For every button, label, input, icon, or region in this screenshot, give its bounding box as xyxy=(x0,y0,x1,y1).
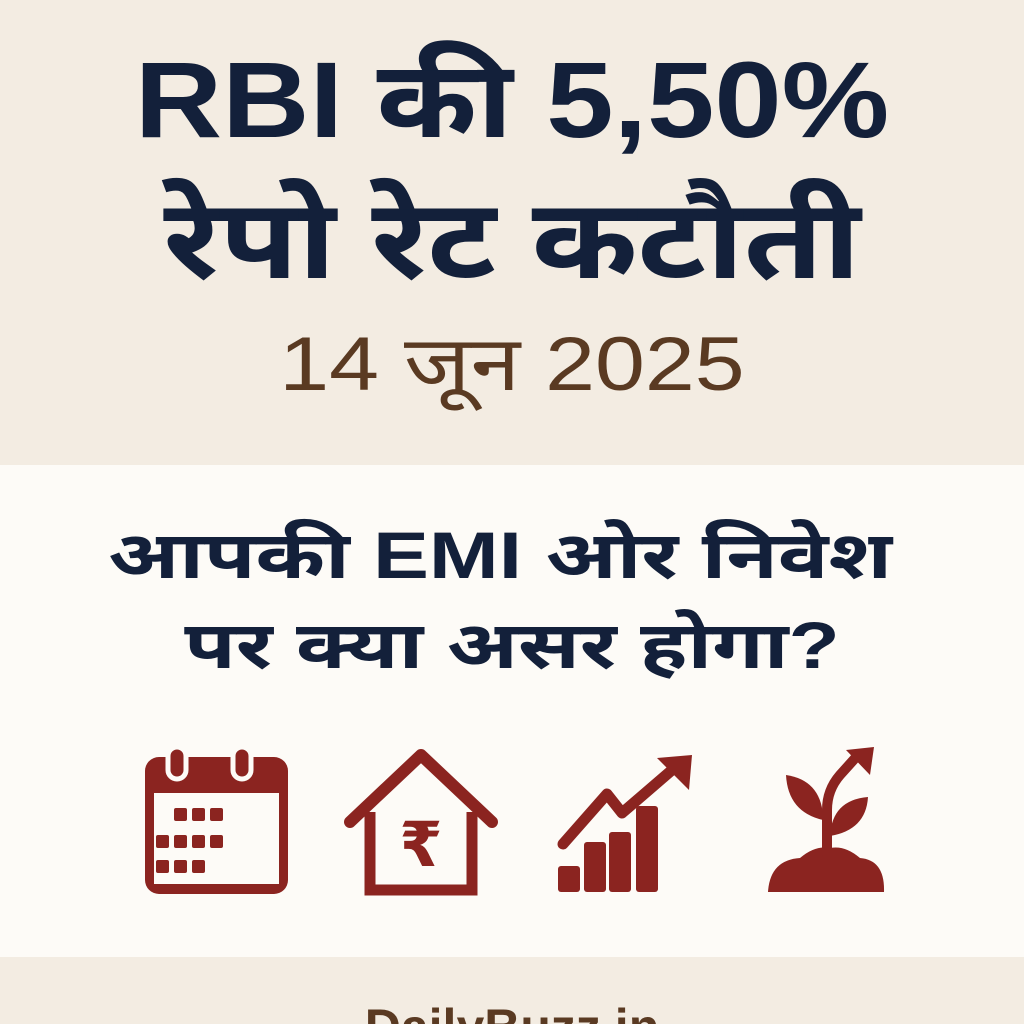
title xyxy=(135,39,889,302)
date: 14 जून 2025 xyxy=(279,322,745,407)
icon: calendar xyxy=(145,747,288,894)
title: RBI की 5,50% xyxy=(135,39,889,160)
icon: growth chart xyxy=(558,755,692,892)
footer: brand xyxy=(0,957,1024,1024)
icons row xyxy=(145,747,884,896)
question heading: पर क्या असर होगा? xyxy=(184,608,840,682)
panel: question and icons xyxy=(0,465,1024,957)
title: रेपो रेट कटौती xyxy=(163,177,861,302)
icon: house with rupee xyxy=(350,755,492,890)
question heading: आपकी EMI ओर निवेश xyxy=(108,518,892,592)
question heading xyxy=(108,518,894,682)
icon: plant growth xyxy=(768,747,884,892)
icon: house with rupee: ₹ xyxy=(399,808,443,881)
panel: header xyxy=(0,0,1024,465)
